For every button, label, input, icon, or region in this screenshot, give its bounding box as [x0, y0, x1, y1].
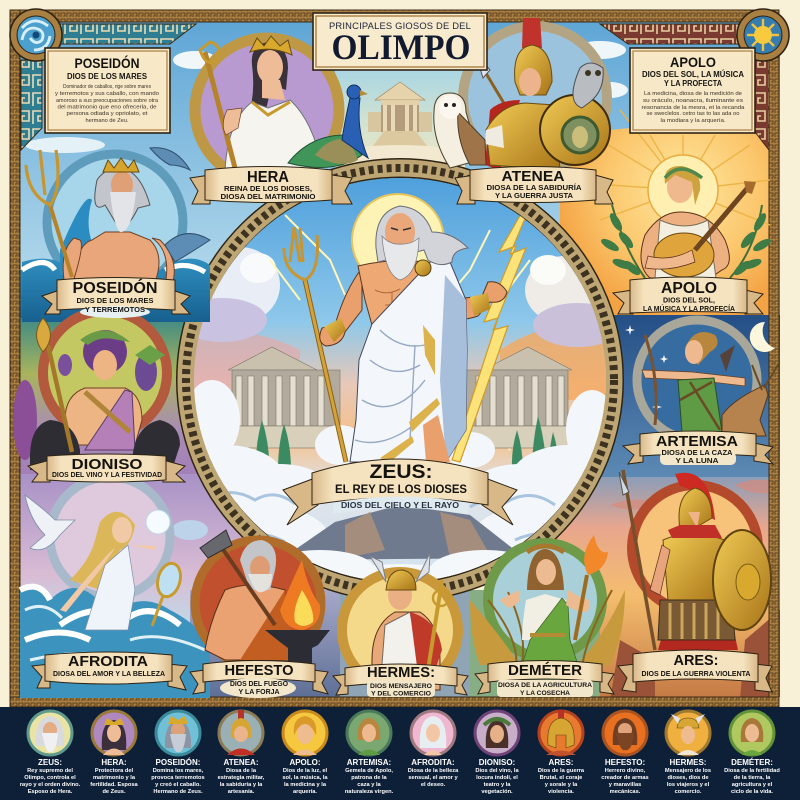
legend: Hefesto: HEFESTO: [605, 758, 645, 767]
info box: Poseidon: amoroso a sus preocupaciones sobre otra [56, 98, 158, 104]
legend: Zeus: rayo y el orden divino. [20, 782, 81, 788]
banner: Afrodita: DIOSA DEL AMOR Y LA BELLEZA [53, 669, 165, 678]
banner: Hermes: DIOS MENSAJERO [370, 683, 432, 690]
legend: Demeter: ciclo de la vida. [731, 789, 773, 795]
legend: Atenea: Diosa de la [226, 768, 257, 774]
title line 2: OLIMPO [332, 27, 470, 67]
banner: Apolo [613, 277, 763, 314]
banner: Demeter [475, 660, 614, 697]
banner: Artemisa [623, 431, 773, 465]
legend: Hefesto [601, 711, 649, 795]
corner medallion: water swirl [10, 9, 62, 61]
title line 1: PRINCIPALES GIOSOS DE DEL [329, 21, 471, 32]
bottom legend bar [0, 707, 800, 800]
banner: Apolo: APOLO [661, 280, 717, 297]
title box [313, 13, 487, 70]
legend: Zeus: ZEUS: [38, 758, 62, 767]
banner: Hermes: Y DEL COMERCIO [371, 690, 431, 698]
Hera figure [195, 36, 339, 182]
info box: Poseidon: Dominador de caballos, rige sobre mares [63, 84, 151, 90]
banner: Apolo: DIOS DEL SOL, [663, 296, 715, 304]
legend: Zeus: Rey supremo del [27, 768, 73, 774]
banner: Hermes [333, 664, 468, 698]
banner: Hermes: HERMES: [367, 664, 435, 681]
legend: Hefesto: creador de armas [601, 775, 649, 781]
legend: Dioniso: vegetación. [481, 789, 513, 795]
banner: Ares [618, 650, 772, 692]
legend: Apolo: sol, la música, la [282, 775, 328, 781]
info box: Apolo: Y LA PROFECTA [664, 79, 722, 88]
info box: Apolo: se sweclelos. cetro tas to las ada oo [646, 111, 740, 117]
legend: Zeus: Esposo de Hera. [28, 789, 73, 795]
legend: Hermes: Mensajero de los [665, 768, 711, 774]
banner: Afrodita: AFRODITA [68, 653, 148, 670]
legend: Dioniso: DIONISO: [479, 758, 515, 767]
banner: Afrodita [32, 652, 187, 690]
banner: Poseidon: DIOS DE LOS MARES [76, 296, 154, 305]
banner: Demeter: DIOSA DE LA AGRICULTURA [498, 682, 592, 689]
legend: Artemisa: ARTEMISA: [347, 758, 391, 767]
banner: Artemisa: Y LA LUNA [676, 458, 718, 465]
legend: Ares: ARES: [549, 758, 573, 767]
legend: Apolo [282, 711, 328, 795]
banner: Atenea: Y LA GUERRA JUSTA [495, 191, 574, 200]
halo [351, 193, 444, 266]
banner: Artemisa: ARTEMISA [656, 433, 738, 450]
legend: Hefesto: Herrero divino, [605, 768, 646, 774]
banner: Poseidon [42, 278, 190, 318]
clouds [194, 380, 606, 563]
legend: Demeter [724, 711, 780, 795]
info box: Apolo: resonancia de la mesra, et la recanda [642, 105, 745, 111]
legend: Atenea [218, 710, 265, 795]
banner: Ares: DIOS DE LA GUERRA VIOLENTA [642, 669, 750, 678]
legend: Zeus: Olimpo, controla el [24, 775, 76, 781]
corner medallion: sun [737, 9, 789, 61]
info box: Apolo: su oráculo, noanacra, iluminante es [643, 98, 743, 104]
trident [305, 280, 346, 462]
legend: Demeter: Diosa de la fertilidad [724, 768, 780, 774]
legend: Hera: Protectora del [95, 768, 134, 774]
legend: Ares [538, 710, 585, 795]
legend: Hera: fertilidad. Esposa [90, 782, 139, 788]
legend: Hera: de Zeus. [102, 789, 126, 795]
laurel [612, 205, 762, 278]
banner: Hefesto: HEFESTO [224, 662, 294, 679]
info box: Apolo: DIOS DEL SOL, LA MÚSICA [642, 70, 744, 79]
legend: Afrodita: sensual, el amor y [408, 775, 458, 781]
legend: Artemisa: naturaleza virgen. [345, 789, 394, 795]
legend: Artemisa: Gemela de Apolo, [345, 768, 393, 774]
info box: Poseidon: POSEIDÓN [74, 56, 140, 71]
Atenea figure [463, 18, 607, 170]
sun-pink sky streaks [194, 334, 300, 392]
legend: Hera [90, 711, 139, 795]
legend: Hera: matrimonio y la [93, 775, 136, 781]
banner: Dioniso: DIONISO [72, 456, 143, 473]
legend: Ares: y sorale y la [545, 782, 578, 788]
banner: Zeus [283, 459, 517, 525]
legend: Hermes: los viajeros y el [667, 782, 710, 788]
legend: Ares: Brutal, el coraje [540, 775, 582, 781]
legend: Demeter: agricultura y el [732, 782, 773, 788]
legend: Afrodita: AFRODITA: [411, 758, 455, 767]
banner: Atenea: DIOSA DE LA SABIDURÍA [486, 183, 582, 192]
banner: Artemisa: DIOSA DE LA CAZA [662, 450, 732, 457]
info box: Apolo: la modiara y la arquería. [660, 118, 726, 124]
legend: Poseidon: Domina los mares, [153, 768, 204, 774]
banner: Dioniso: DIOS DEL VINO Y LA FESTIVIDAD [52, 472, 162, 479]
banner: Hera [190, 166, 352, 204]
legend: Dioniso [475, 711, 519, 795]
banner: Hera: DIOSA DEL MATRIMONIO [220, 192, 316, 201]
robe [350, 262, 467, 462]
greek key band: maroon corner [600, 24, 769, 150]
legend: Hermes [665, 711, 711, 795]
banner: Atenea [455, 166, 613, 204]
Afrodita figure [20, 477, 210, 698]
legend: Dioniso: locura índoli, el [476, 775, 518, 781]
banner: Poseidon: Y TERREMOTOS [85, 305, 145, 314]
legend: Apolo: la medicina y la [284, 782, 327, 788]
legend: Apolo: arquería. [293, 789, 317, 795]
legend: Hermes: comercio. [675, 789, 702, 795]
central temple background [335, 68, 465, 168]
banner: Hefesto: Y LA FORJA [238, 689, 280, 696]
right temple [466, 346, 572, 448]
owl: barn [434, 93, 486, 168]
banner: Ares: ARES: [674, 652, 718, 669]
banner: Demeter: DEMÉTER [508, 662, 582, 679]
info box: Poseidon: hermano de Zeu. [86, 118, 128, 124]
Poseidon figure [22, 148, 210, 322]
legend: Poseidon: Hermano de Zeus. [153, 789, 203, 795]
banner: Zeus: EL REY DE LOS DIOSES [335, 484, 467, 496]
Dioniso figure [13, 311, 180, 470]
info box: Apolo [630, 48, 755, 133]
banner: Zeus: ZEUS: [370, 462, 432, 483]
legend: Ares: Dios de la guerra [538, 768, 585, 774]
peacock [288, 85, 368, 168]
info box: Apolo: La medicina, diosa de la medición de [644, 91, 742, 97]
banner: Hera: REINA DE LOS DIOSES, [224, 184, 312, 193]
info box: Poseidon: persona odiada y opriolato, et [66, 111, 148, 117]
legend: Artemisa: patrona de la [351, 775, 388, 781]
legend: Dioniso: teatro y la [484, 782, 511, 788]
Apolo figure [599, 110, 773, 278]
legend: Hermes: HERMES: [670, 758, 706, 767]
info box: Poseidon: DIOS DE LOS MARES [67, 72, 148, 81]
arms [320, 268, 362, 346]
legend: Poseidon: y creó el caballo. [155, 782, 201, 788]
info box: Poseidon: del matrimonio que eno ofrecerla, de [58, 104, 157, 110]
legend: Demeter: DEMÉTER: [731, 758, 773, 767]
legend: Atenea: estrategia militar, [218, 775, 265, 781]
banner: Hera: HERA [247, 169, 289, 186]
banner: Dioniso [28, 454, 185, 482]
left temple [222, 347, 347, 448]
legend: Atenea: artesanía. [228, 789, 255, 795]
legend: Hefesto: y maravillas [609, 782, 641, 788]
Hefesto figure [195, 530, 330, 666]
banner: Zeus: DIOS DEL CIELO Y EL RAYO [341, 501, 460, 510]
mountain [297, 508, 512, 560]
head and hair [376, 206, 468, 265]
legend: Ares: violencia. [548, 789, 574, 795]
legend: Apolo: APOLO: [289, 758, 321, 767]
legend: Poseidon [151, 711, 205, 795]
Artemisa figure [625, 320, 778, 440]
info box: Poseidon: y terremotos y sus caballo, con mando [55, 91, 159, 97]
greek key band: teal corner [21, 24, 196, 150]
Atenea shield [540, 95, 610, 165]
legend: Artemisa: caza y la [357, 782, 382, 788]
legend: Hermes: dioses, dios de [667, 775, 709, 781]
legend: Atenea: la sabiduría y la [220, 782, 263, 788]
banner: Hefesto [190, 660, 328, 698]
legend: Apolo: Dios de la luz, el [283, 768, 328, 774]
Hermes figure [342, 553, 458, 690]
legend: Afrodita: Diosa de la belleza [408, 768, 459, 774]
Ares figure [619, 470, 771, 650]
banner: Demeter: Y LA COSECHA [520, 690, 570, 697]
central oval with Zeus [165, 168, 630, 600]
legend: Poseidon: POSEIDÓN: [156, 758, 200, 767]
legend: Demeter: de la tierra, la [734, 775, 771, 781]
info box: Poseidon [45, 48, 170, 133]
info box: Apolo: APOLO [670, 54, 716, 70]
legend: Poseidon: provoca terremotos [151, 775, 205, 781]
banner: Poseidon: POSEIDÓN [72, 278, 158, 297]
banner: Hefesto: DIOS DEL FUEGO [230, 681, 289, 688]
banner: Atenea: ATENEA [502, 168, 565, 185]
legend: Zeus [20, 711, 81, 795]
legend: Hefesto: mecánicas. [610, 789, 641, 795]
legend: Hera: HERA: [101, 758, 127, 767]
Demeter figure [470, 535, 625, 670]
lightning bolt [452, 207, 529, 462]
owl: silver [573, 63, 603, 108]
lightning streaks [270, 215, 530, 450]
legend: Dioniso: Dios del vino, la [475, 768, 519, 774]
legend: Afrodita [408, 711, 459, 788]
legend: Afrodita: el deseo. [421, 782, 446, 788]
legend: Atenea: ATENEA: [224, 758, 258, 767]
legend: Artemisa [345, 711, 394, 795]
cypress trees [256, 416, 558, 470]
torso [357, 260, 418, 325]
banner: Apolo: LA MÚSICA Y LA PROFECÍA [643, 304, 735, 313]
